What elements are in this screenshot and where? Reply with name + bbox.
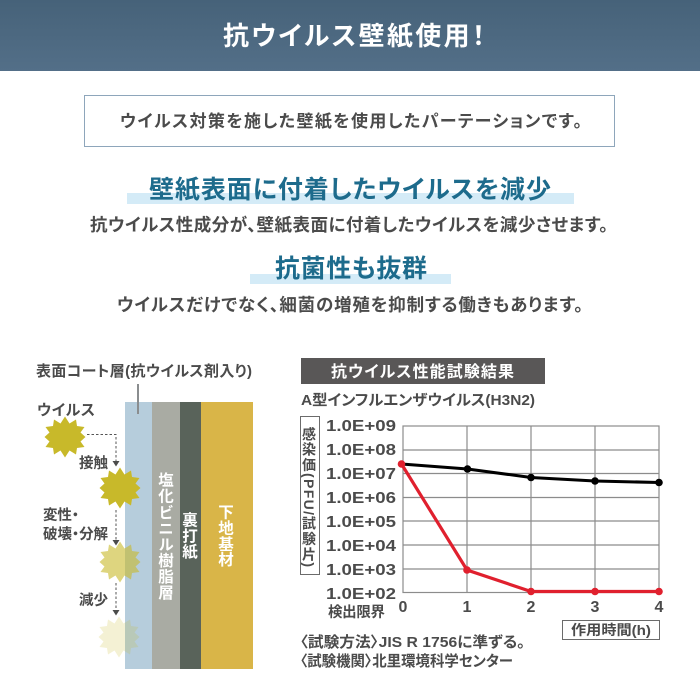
y axis labels: 1.0E+05 bbox=[326, 514, 396, 531]
note: test institution: 〈試験機関〉北里環境科学センター bbox=[300, 652, 513, 670]
layer: base material: 下地基材 bbox=[216, 504, 234, 567]
chart title bar bbox=[301, 358, 545, 384]
label: surface coat layer: 表面コート層(抗ウイルス剤入り) bbox=[36, 362, 252, 380]
series: antiviral wallpaper (red) bbox=[398, 460, 663, 595]
layer: backing paper bbox=[180, 402, 201, 669]
arrow: virus to contact bbox=[87, 434, 120, 466]
text: antibacterial description: ウイルスだけでなく、細菌の増殖を抑制する働きもあります。 bbox=[117, 295, 583, 315]
y axis labels: 1.0E+07 bbox=[326, 466, 396, 483]
intro box bbox=[84, 96, 614, 146]
chart title bar: 抗ウイルス性能試験結果 bbox=[331, 362, 514, 381]
series: control (black) bbox=[402, 464, 663, 486]
title: 抗ウイルス壁紙使用！ bbox=[223, 21, 485, 51]
y axis labels bbox=[326, 418, 396, 603]
x axis title: 作用時間(h) bbox=[571, 622, 651, 638]
icon: virus bbox=[44, 416, 86, 458]
label: reduction: 減少 bbox=[79, 592, 108, 609]
y axis labels: 1.0E+03 bbox=[326, 562, 396, 579]
layer: PVC resin: 塩化ビニル樹脂層 bbox=[156, 472, 174, 601]
x axis labels: 4 bbox=[655, 599, 664, 616]
y axis labels: 1.0E+04 bbox=[326, 538, 396, 555]
layer: surface coat bbox=[125, 402, 152, 669]
icon: degraded virus bbox=[100, 542, 140, 582]
x axis labels: 1 bbox=[463, 599, 472, 616]
leader line bbox=[137, 384, 139, 414]
x axis labels: 0 bbox=[399, 599, 408, 616]
label: contact: 接触 bbox=[79, 455, 108, 472]
label: degradation: 破壊・分解 bbox=[43, 525, 108, 543]
x axis title bbox=[562, 620, 660, 640]
x axis labels: 3 bbox=[591, 599, 600, 616]
label: degradation: 変性・ bbox=[43, 507, 79, 524]
arrow: degradation to reduction bbox=[112, 583, 120, 616]
header banner bbox=[0, 0, 700, 71]
layer: PVC resin bbox=[152, 402, 180, 669]
line chart bbox=[326, 418, 664, 621]
y axis labels: 1.0E+06 bbox=[326, 490, 396, 507]
text: virus reduction description: 抗ウイルス性成分が、壁紙表面に付着したウイルスを減少させます。 bbox=[90, 215, 608, 235]
y axis labels: 1.0E+09 bbox=[326, 418, 396, 435]
icon: reduced virus bbox=[98, 616, 140, 658]
chart subtitle: A型インフルエンザウイルス(H3N2) bbox=[301, 392, 535, 409]
icon: virus in contact bbox=[100, 468, 140, 508]
label: virus: ウイルス bbox=[37, 402, 95, 419]
layer: base material bbox=[201, 402, 253, 669]
note: test method: 〈試験方法〉JIS R 1756に準ずる。 bbox=[300, 633, 525, 651]
arrow: contact to degradation bbox=[112, 510, 120, 546]
panel: wallpaper layers diagram bbox=[36, 362, 253, 669]
grid bbox=[403, 426, 659, 592]
heading: antibacterial: 抗菌性も抜群 bbox=[275, 255, 427, 283]
y axis title: 感染価(PFU/試験片) bbox=[301, 426, 317, 567]
label: degradation bbox=[43, 507, 108, 543]
panel: test results bbox=[300, 358, 664, 670]
layer: backing paper: 裏打紙 bbox=[180, 511, 198, 560]
x axis labels: 2 bbox=[527, 599, 536, 616]
intro box: ウイルス対策を施した壁紙を使用したパーテーションです。 bbox=[120, 111, 582, 131]
y axis labels: 1.0E+02 bbox=[326, 586, 396, 603]
heading: virus reduction: 壁紙表面に付着したウイルスを減少 bbox=[149, 176, 551, 204]
detection limit label: 検出限界 bbox=[328, 604, 386, 621]
x axis labels bbox=[399, 599, 664, 616]
y axis labels: 1.0E+08 bbox=[326, 442, 396, 459]
